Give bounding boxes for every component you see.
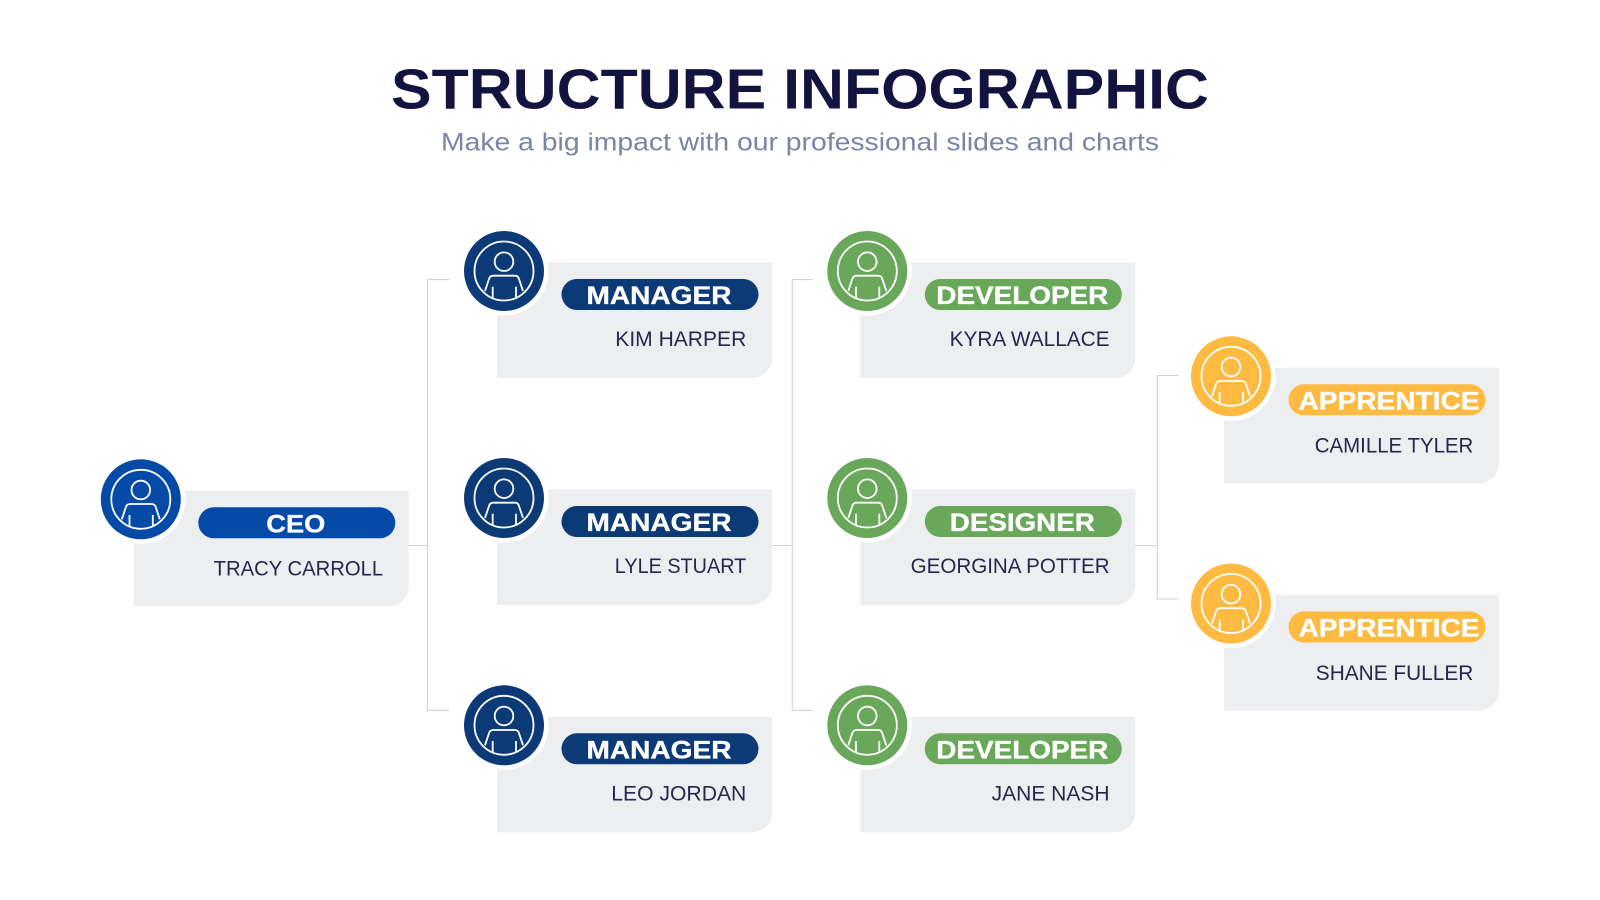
name: LEO JORDAN [611, 781, 746, 805]
role pill [925, 279, 1122, 310]
card [860, 490, 1135, 605]
node: Developer Kyra Wallace [823, 226, 1135, 378]
connector: managers to second tier [772, 280, 813, 710]
role: MANAGER [586, 509, 732, 537]
card [1224, 595, 1499, 710]
node: Manager Leo Jordan [459, 681, 772, 832]
name: CAMILLE TYLER [1315, 434, 1473, 458]
connector: CEO to managers [409, 280, 449, 710]
name: JANE NASH [992, 781, 1110, 805]
role pill [925, 506, 1122, 537]
card [497, 490, 772, 605]
icon: person [823, 453, 912, 543]
node: Apprentice Shane Fuller [1186, 559, 1499, 710]
icon: person [823, 226, 912, 316]
role pill [562, 279, 758, 310]
node: Manager Lyle Stuart [459, 453, 772, 605]
icon: person [459, 681, 549, 770]
role pill [1288, 384, 1486, 415]
role pill [562, 506, 758, 537]
card [860, 717, 1135, 832]
role: DEVELOPER [936, 282, 1108, 310]
card [860, 262, 1135, 378]
node: Developer Jane Nash [823, 681, 1135, 832]
name: SHANE FULLER [1316, 661, 1473, 685]
role: APPRENTICE [1298, 615, 1480, 643]
icon: person [823, 681, 912, 770]
role: DESIGNER [950, 509, 1095, 537]
role: APPRENTICE [1298, 388, 1480, 416]
icon: person [459, 453, 549, 543]
node: CEO Tracy Carroll [96, 455, 409, 606]
node: Apprentice Camille Tyler [1186, 332, 1499, 483]
card [497, 262, 772, 378]
name: KIM HARPER [615, 327, 746, 351]
role: CEO [266, 511, 325, 539]
subtitle: Make a big impact with our professional slides and charts [441, 128, 1159, 156]
name: LYLE STUART [615, 554, 746, 578]
card [497, 717, 772, 832]
role: MANAGER [586, 282, 732, 310]
role: MANAGER [586, 736, 732, 764]
node: Manager Kim Harper [459, 226, 772, 378]
connector: designer to apprentices [1135, 376, 1178, 599]
role pill [925, 733, 1122, 764]
card [134, 491, 409, 606]
role pill [1288, 612, 1486, 642]
node: Designer Georgina Potter [823, 453, 1135, 605]
icon: person [1186, 332, 1276, 421]
card [1224, 368, 1499, 483]
name: KYRA WALLACE [950, 327, 1110, 351]
role pill [562, 733, 758, 764]
icon: person [96, 455, 186, 544]
icon: person [1186, 559, 1276, 648]
name: TRACY CARROLL [214, 557, 383, 581]
title: STRUCTURE INFOGRAPHIC [391, 58, 1209, 122]
role pill [198, 507, 395, 538]
role: DEVELOPER [936, 736, 1108, 764]
icon: person [459, 226, 549, 316]
name: GEORGINA POTTER [911, 554, 1110, 578]
